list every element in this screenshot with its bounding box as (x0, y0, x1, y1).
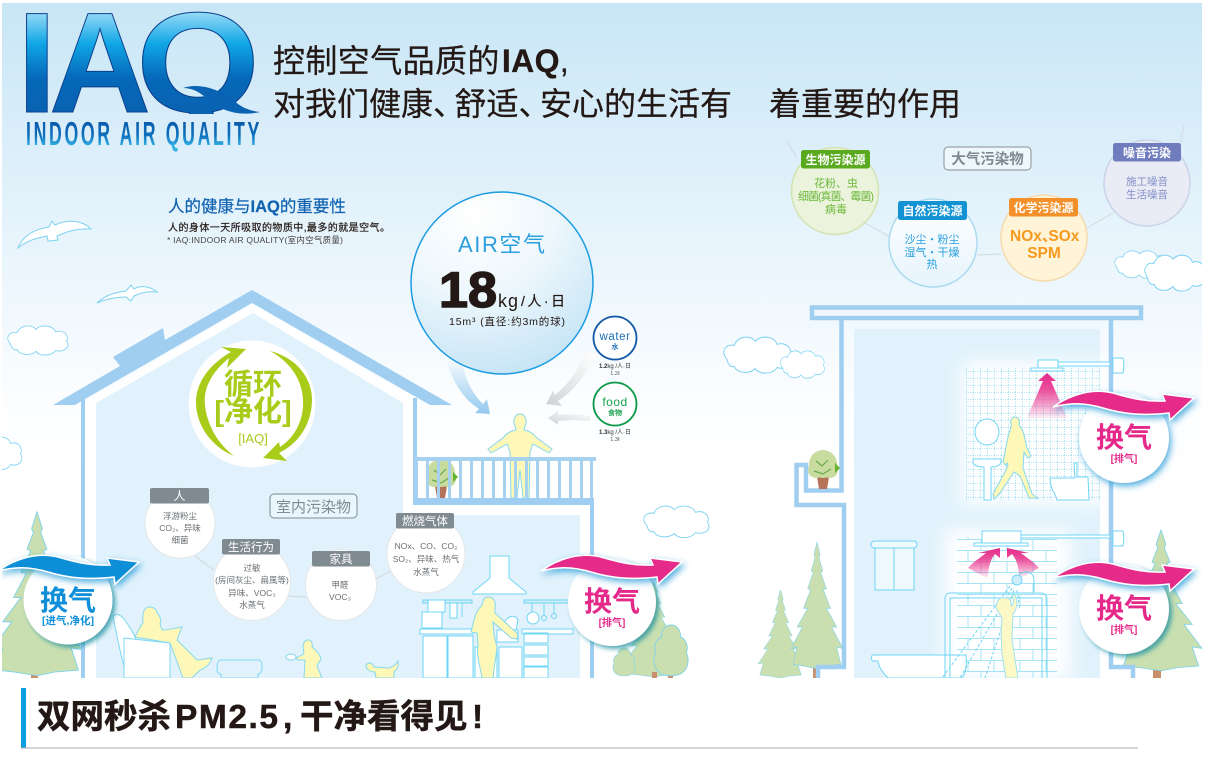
intro text: 人的身体一天所吸取的物质中,最多的就是空气。 (168, 221, 390, 234)
roof (53, 290, 452, 405)
brick wall (957, 537, 1057, 678)
bird 2 (97, 285, 157, 303)
indoor pollutants label: 室内污染物 (276, 499, 351, 516)
headline: 控制空气品质的IAQ, (273, 43, 569, 79)
bubble: noise: 施工噪音 (1126, 175, 1168, 188)
dog (366, 661, 398, 678)
circulation badge (188, 340, 316, 468)
air circle: kg (498, 291, 519, 311)
shower enclosure (945, 572, 1047, 678)
cloud center right (724, 337, 791, 373)
bubble: noise (1104, 140, 1190, 226)
building (796, 308, 1141, 680)
bubble: biological: 病毒 (825, 202, 847, 216)
bubble: chemical: SPM (1027, 245, 1061, 262)
headline: 着重要的作用 (769, 86, 961, 122)
trees beside building left (758, 542, 843, 678)
bubble: activities (214, 539, 290, 620)
slogan: ! (472, 699, 483, 736)
arrow: air to person (447, 362, 490, 414)
food badge (594, 382, 636, 443)
food badge: 1.3kg /人·日 (599, 429, 631, 436)
kitchen (420, 556, 585, 678)
house interior (85, 303, 590, 678)
arrow and badge: upper exhaust: 换气 (1096, 422, 1152, 453)
bubble: furniture: 甲醛 (331, 580, 349, 590)
food badge: 1.3ℓ (610, 437, 620, 443)
intro text (167, 197, 390, 245)
arrow and badge: lower exhaust: 换气 (1096, 593, 1152, 624)
bathtub (872, 655, 966, 678)
bottom band (0, 678, 1208, 765)
bubble: noise: 噪音污染 (1123, 145, 1171, 160)
kettle and pots (422, 600, 554, 628)
tennis child (296, 640, 322, 678)
white wash behind bath (945, 530, 1070, 680)
bubble: combustion: SO₂、异味、热气 (393, 554, 460, 564)
outdoor pollutants label (944, 147, 1031, 170)
bubble: furniture (306, 550, 376, 620)
bubble: activities: 异味、VOC₃ (228, 588, 276, 598)
airflow lower right (1007, 548, 1039, 579)
arrow and badge: kitchen exhaust: [排气] (599, 616, 625, 629)
left margin (0, 0, 2, 678)
bubble: biological: 花粉、虫 (814, 177, 858, 190)
balcony (413, 414, 596, 505)
arrow and badge: intake: 换气 (40, 585, 96, 616)
counter and cabinets (420, 629, 573, 678)
arrow and badge: kitchen exhaust: 换气 (584, 586, 640, 617)
exhaust fan upper (1031, 358, 1124, 373)
logo: IAQ (26, 12, 260, 152)
slogan accent bar (21, 688, 26, 748)
cloud far right front (1145, 255, 1205, 291)
slogan: 干净看得见 (300, 699, 468, 736)
bubble: biological: 生物污染源 (805, 152, 866, 167)
tile wall (966, 367, 1100, 500)
building frame (796, 308, 1141, 678)
bubble: chemical (1001, 195, 1087, 281)
bubble: activities: 生活行为 (228, 540, 274, 554)
arrow and badge: lower exhaust (1053, 562, 1194, 654)
bubble: furniture: VOC₃ (329, 592, 351, 602)
cloud far right back (1115, 251, 1168, 278)
water badge: 1.2kg /人·日 (599, 363, 631, 370)
bubble: activities: (房间灰尘、扁風等) (215, 575, 289, 585)
bubble: natural: 沙尘・粉尘 (904, 233, 960, 246)
bubble: chemical: 化学污染源 (1013, 200, 1074, 215)
balcony plant (426, 459, 458, 498)
living room figures (113, 607, 398, 678)
footstool (217, 660, 262, 678)
shelf rails (423, 600, 585, 603)
air circle: 18 (439, 262, 497, 318)
trees beside house (613, 582, 688, 678)
tree left (0, 512, 82, 678)
cloud near left edge (0, 437, 22, 470)
arrow and badge: lower exhaust: [排气] (1111, 623, 1137, 636)
sitting person (135, 607, 212, 678)
bubble: combustion: 水蒸气 (413, 567, 439, 577)
bubble: natural: 湿气・干燥 (904, 245, 960, 259)
arrow and badge: intake: [进气,净化] (42, 614, 94, 627)
headline (273, 43, 961, 122)
sink (973, 459, 1001, 500)
airflow lower left (968, 548, 1000, 579)
woman (471, 597, 518, 678)
bubble: biological (792, 148, 878, 234)
logo: IAQ: INDOOR AIR QUALITY (26, 115, 262, 152)
water badge: water (598, 331, 631, 343)
house (53, 290, 596, 678)
indoor pollutants label (270, 494, 357, 518)
building interior (854, 329, 1100, 678)
circulation badge: 循环 (224, 368, 282, 401)
water badge (594, 316, 636, 377)
walking person (993, 417, 1038, 499)
bubble: noise: 生活噪音 (1126, 188, 1168, 201)
shower spray (942, 586, 1020, 678)
slogan rule (21, 748, 1138, 749)
bubble: people: 人 (173, 489, 186, 503)
range hood (473, 556, 526, 594)
bubble: people: 浮游粉尘 (163, 511, 197, 521)
air circle: 15m³ (直径:约3m的球) (449, 315, 565, 328)
arrow and badge: upper exhaust: [排气] (1111, 452, 1137, 465)
intro text: 人的健康与IAQ的重要性 (168, 197, 346, 216)
bubble: natural: 热 (926, 258, 938, 271)
walls (81, 398, 594, 678)
bubble: activities: 水蒸气 (239, 600, 265, 610)
air circle: /人·日 (521, 293, 565, 309)
bubble: people (145, 488, 215, 558)
shower head (1012, 575, 1022, 585)
headline: 对我们健康、舒适、安心的生活有 (273, 86, 732, 122)
bubble: combustion: 燃烧气体 (402, 514, 448, 528)
arrow: food to person (548, 411, 590, 425)
arrow and badge: intake (0, 555, 139, 644)
armchair back (113, 615, 137, 672)
tennis racket (286, 654, 296, 660)
cloud near kitchen (644, 506, 709, 538)
bubble: chemical: NOx、SOx (1010, 228, 1080, 245)
cloud small right (781, 351, 825, 378)
slogan: , (283, 699, 292, 736)
cloud left (8, 326, 68, 355)
intro text: * IAQ:INDOOR AIR QUALITY(室内空气质量) (167, 235, 343, 245)
circulation badge: [IAQ] (238, 431, 268, 446)
person on balcony (488, 414, 552, 498)
bubble: combustion: NOx、CO、CO₂ (395, 541, 457, 551)
bubble: people: 细菌 (171, 535, 189, 545)
armchair seat (124, 638, 170, 678)
tree beside building right (1120, 530, 1202, 678)
slogan: PM2.5 (175, 699, 278, 736)
bubble: natural: 自然污染源 (902, 203, 963, 218)
bubble: furniture: 家具 (330, 552, 353, 566)
air circle: AIR空气 (458, 232, 545, 257)
bubble: biological: 细菌(真菌、霉菌) (798, 189, 874, 203)
bubble: activities: 过敏 (243, 563, 261, 573)
water badge: 1.2ℓ (610, 371, 620, 377)
air circle (411, 192, 593, 374)
bubble: natural (889, 199, 977, 287)
arrow: water to person (546, 354, 596, 406)
exhaust fan lower (974, 531, 1124, 546)
bird 1 (18, 221, 91, 248)
circulation badge: [净化] (214, 395, 292, 428)
food badge: 食物 (608, 408, 622, 417)
slogan: 双网秒杀 (37, 699, 171, 736)
showering person (996, 594, 1018, 678)
food badge: food (602, 395, 628, 409)
outdoor pollutants label: 大气污染物 (951, 150, 1024, 168)
bubble: people: CO₂、异味 (159, 523, 201, 533)
water badge: 水 (612, 342, 618, 351)
right margin (1202, 0, 1208, 678)
white wash behind washroom (962, 362, 1108, 504)
arrow and badge: kitchen exhaust (541, 555, 682, 646)
connectors outdoor (787, 125, 1184, 255)
window (871, 541, 917, 590)
mirror (975, 419, 999, 445)
bubble: combustion (387, 513, 465, 593)
connectors indoor (195, 556, 392, 597)
toilet (1050, 463, 1089, 500)
airflow upper (1026, 373, 1068, 420)
arrow and badge: upper exhaust (1053, 391, 1194, 483)
building plant (808, 450, 840, 489)
